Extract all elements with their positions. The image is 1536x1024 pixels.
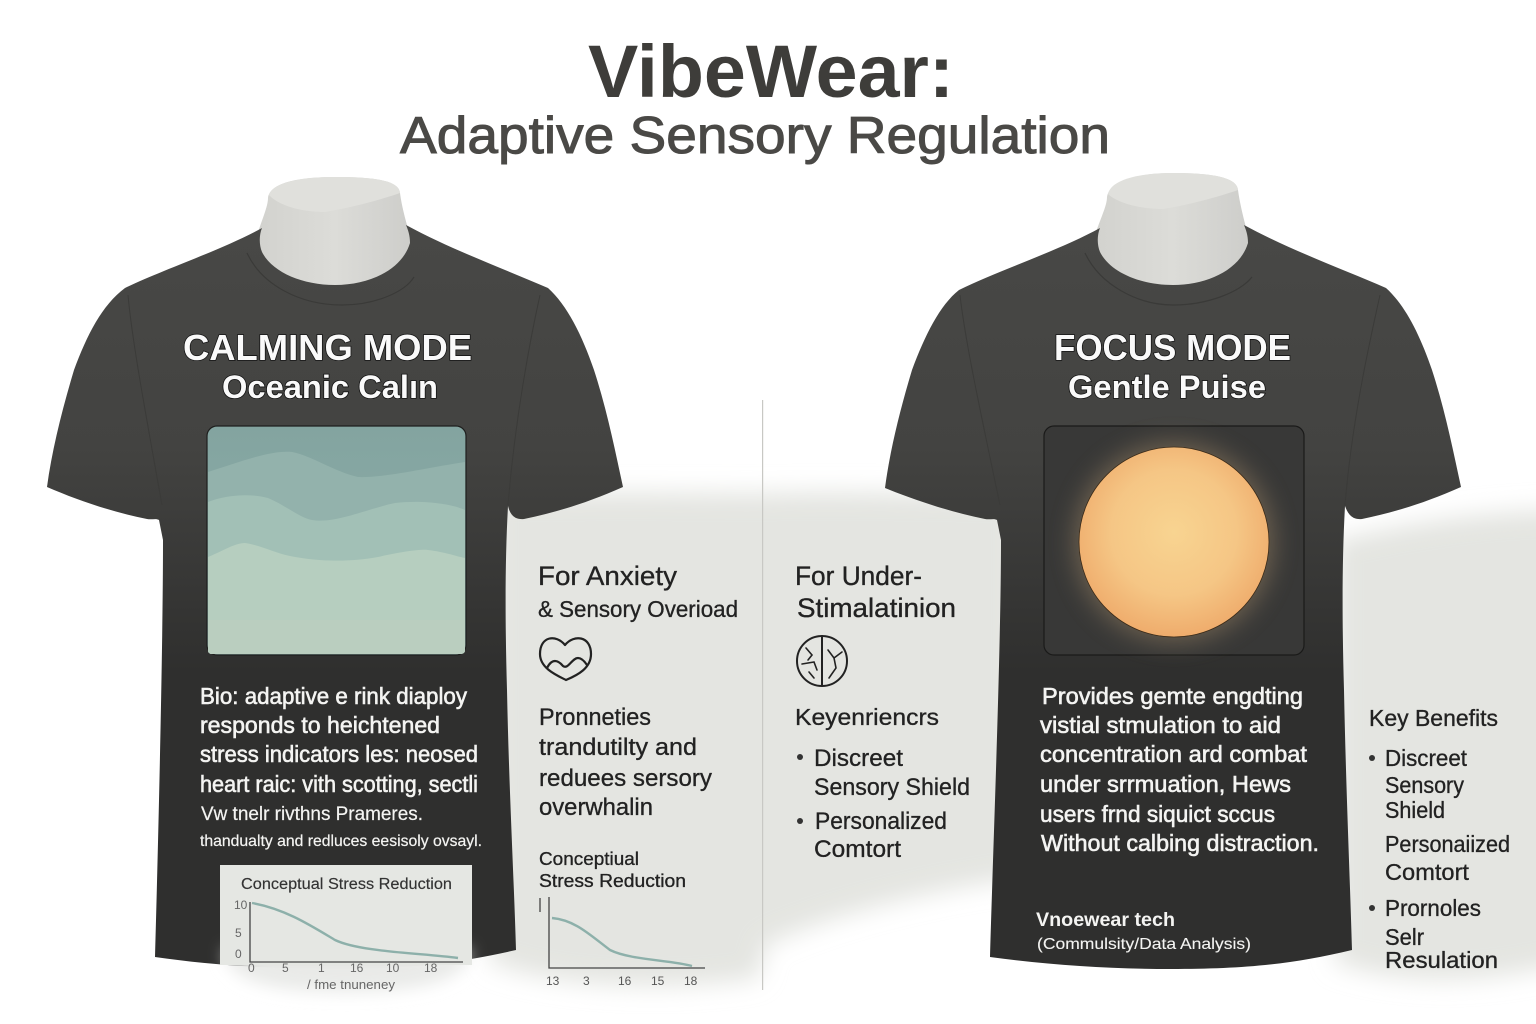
- bullet list: Prornoles: [1385, 895, 1481, 921]
- chart axis labels: 0: [235, 947, 242, 961]
- t-shirt body: [47, 225, 623, 969]
- description text: [1040, 683, 1319, 856]
- mini stress chart: [540, 897, 705, 988]
- panel: focus mode shirt: [885, 173, 1461, 969]
- t-shirt body: [885, 225, 1461, 969]
- description: trandutilty and: [539, 734, 697, 761]
- collar seam: [247, 253, 414, 305]
- chart axis labels: 1: [318, 961, 325, 975]
- description text: responds to heichtened: [200, 712, 440, 738]
- panel: under-stimulation: [795, 561, 970, 863]
- chart axes: [250, 902, 463, 962]
- mode heading: FOCUS MODE: [1054, 327, 1291, 368]
- chart axis labels: 10: [386, 961, 400, 975]
- title: [400, 30, 1110, 165]
- neck top highlight: [269, 177, 400, 212]
- bullet list: Discreet: [814, 745, 903, 772]
- sleeve seams: [960, 295, 1380, 505]
- bullet list: [797, 745, 970, 863]
- description text: concentration ard combat: [1040, 741, 1308, 767]
- description text: heart raic: vith scotting, sectli: [200, 771, 478, 797]
- subheading: Keyenriencrs: [795, 704, 939, 730]
- mode name: Gentle Puise: [1068, 369, 1266, 405]
- display: glowing orb: [1044, 426, 1304, 655]
- mode heading: CALMING MODE: [183, 327, 472, 368]
- description: Pronneties: [539, 704, 651, 731]
- panel: calming mode shirt: [47, 177, 623, 992]
- chart axis labels: 10: [234, 898, 248, 912]
- source note: (Commulsity/Data Analysis): [1037, 936, 1251, 953]
- bullet list: Comtort: [1385, 859, 1470, 885]
- bullet list: Selr: [1385, 924, 1424, 950]
- mini stress chart: 15: [651, 974, 665, 988]
- chart axis labels: 16: [350, 961, 364, 975]
- chart axis labels: 18: [424, 961, 438, 975]
- mini stress chart: 13: [546, 974, 560, 988]
- description text: stress indicators les: neosed: [200, 741, 478, 767]
- column heading second line: Stimalatinion: [797, 593, 956, 623]
- background panel: key benefits column: [1335, 510, 1536, 979]
- description: [539, 704, 712, 821]
- column subheading: & Sensory Overioad: [538, 596, 738, 622]
- mini stress chart: 3: [583, 974, 590, 988]
- mini stress chart: 16: [618, 974, 632, 988]
- chart card: conceptual stress reduction: [220, 865, 472, 992]
- panel: anxiety and sensory overload: [538, 561, 738, 988]
- column heading: For Under-: [795, 561, 922, 591]
- display: ocean waves: [207, 426, 466, 655]
- neck top highlight: [1108, 173, 1238, 209]
- bullet list: Resulation: [1385, 947, 1498, 973]
- background panel: anxiety and under-stimulation columns: [490, 492, 1020, 986]
- mode name: Oceanic Calın: [222, 369, 438, 405]
- column heading: For Anxiety: [538, 561, 678, 591]
- bullet list: [1369, 745, 1510, 973]
- icon: heart with wave: [540, 638, 591, 680]
- title line: brand: VibeWear:: [588, 30, 954, 113]
- mini chart title: [539, 849, 686, 891]
- chart axis labels: [234, 898, 438, 992]
- bullet list: Personaiized: [1385, 831, 1510, 857]
- bullet list: Sensory: [1385, 772, 1464, 798]
- mini chart title: Stress Reduction: [539, 871, 686, 891]
- description text: Without calbing distraction.: [1041, 830, 1319, 856]
- description text: under srrmuation, Hews: [1040, 771, 1291, 797]
- chart axis labels: 5: [235, 926, 242, 940]
- description: overwhalin: [539, 794, 653, 821]
- column divider: [762, 400, 763, 990]
- bullet list: Shield: [1385, 797, 1445, 823]
- description text: thandualty and redluces eesisoly ovsayl.: [200, 833, 482, 850]
- mannequin neck: [1095, 173, 1250, 287]
- description text: Vw tnelr rivthns Prameres.: [201, 804, 423, 825]
- mannequin neck: [257, 177, 412, 287]
- source note: Vnoewear tech: [1036, 910, 1175, 931]
- sleeve seams: [128, 295, 540, 505]
- description text: vistial stmulation to aid: [1040, 712, 1281, 738]
- source note: [1036, 910, 1251, 953]
- panel: key benefits: [1369, 705, 1510, 973]
- chart axis labels: 5: [282, 961, 289, 975]
- column heading: Key Benefits: [1369, 705, 1498, 731]
- bullet list: Sensory Shield: [814, 774, 970, 801]
- icon: brain: [797, 636, 847, 686]
- stress curve: [252, 903, 458, 958]
- mini chart title: Conceptiual: [539, 849, 639, 869]
- collar seam: [1085, 253, 1252, 305]
- description text: [200, 683, 482, 850]
- bullet list: Discreet: [1385, 745, 1468, 771]
- chart axis labels: / fme tnuneney: [307, 977, 396, 992]
- subtitle: Adaptive Sensory Regulation: [400, 107, 1110, 165]
- description text: Provides gemte engdting: [1042, 683, 1303, 709]
- mini stress chart: 18: [684, 974, 698, 988]
- description text: Bio: adaptive e rink diaploy: [200, 683, 467, 709]
- bullet list: Comtort: [814, 836, 901, 863]
- bullet list: Personalized: [815, 808, 947, 835]
- description: reduees sersory: [539, 765, 712, 792]
- chart axis labels: 0: [248, 961, 255, 975]
- description text: users frnd siquict sccus: [1040, 801, 1275, 827]
- chart title: Conceptual Stress Reduction: [241, 876, 452, 893]
